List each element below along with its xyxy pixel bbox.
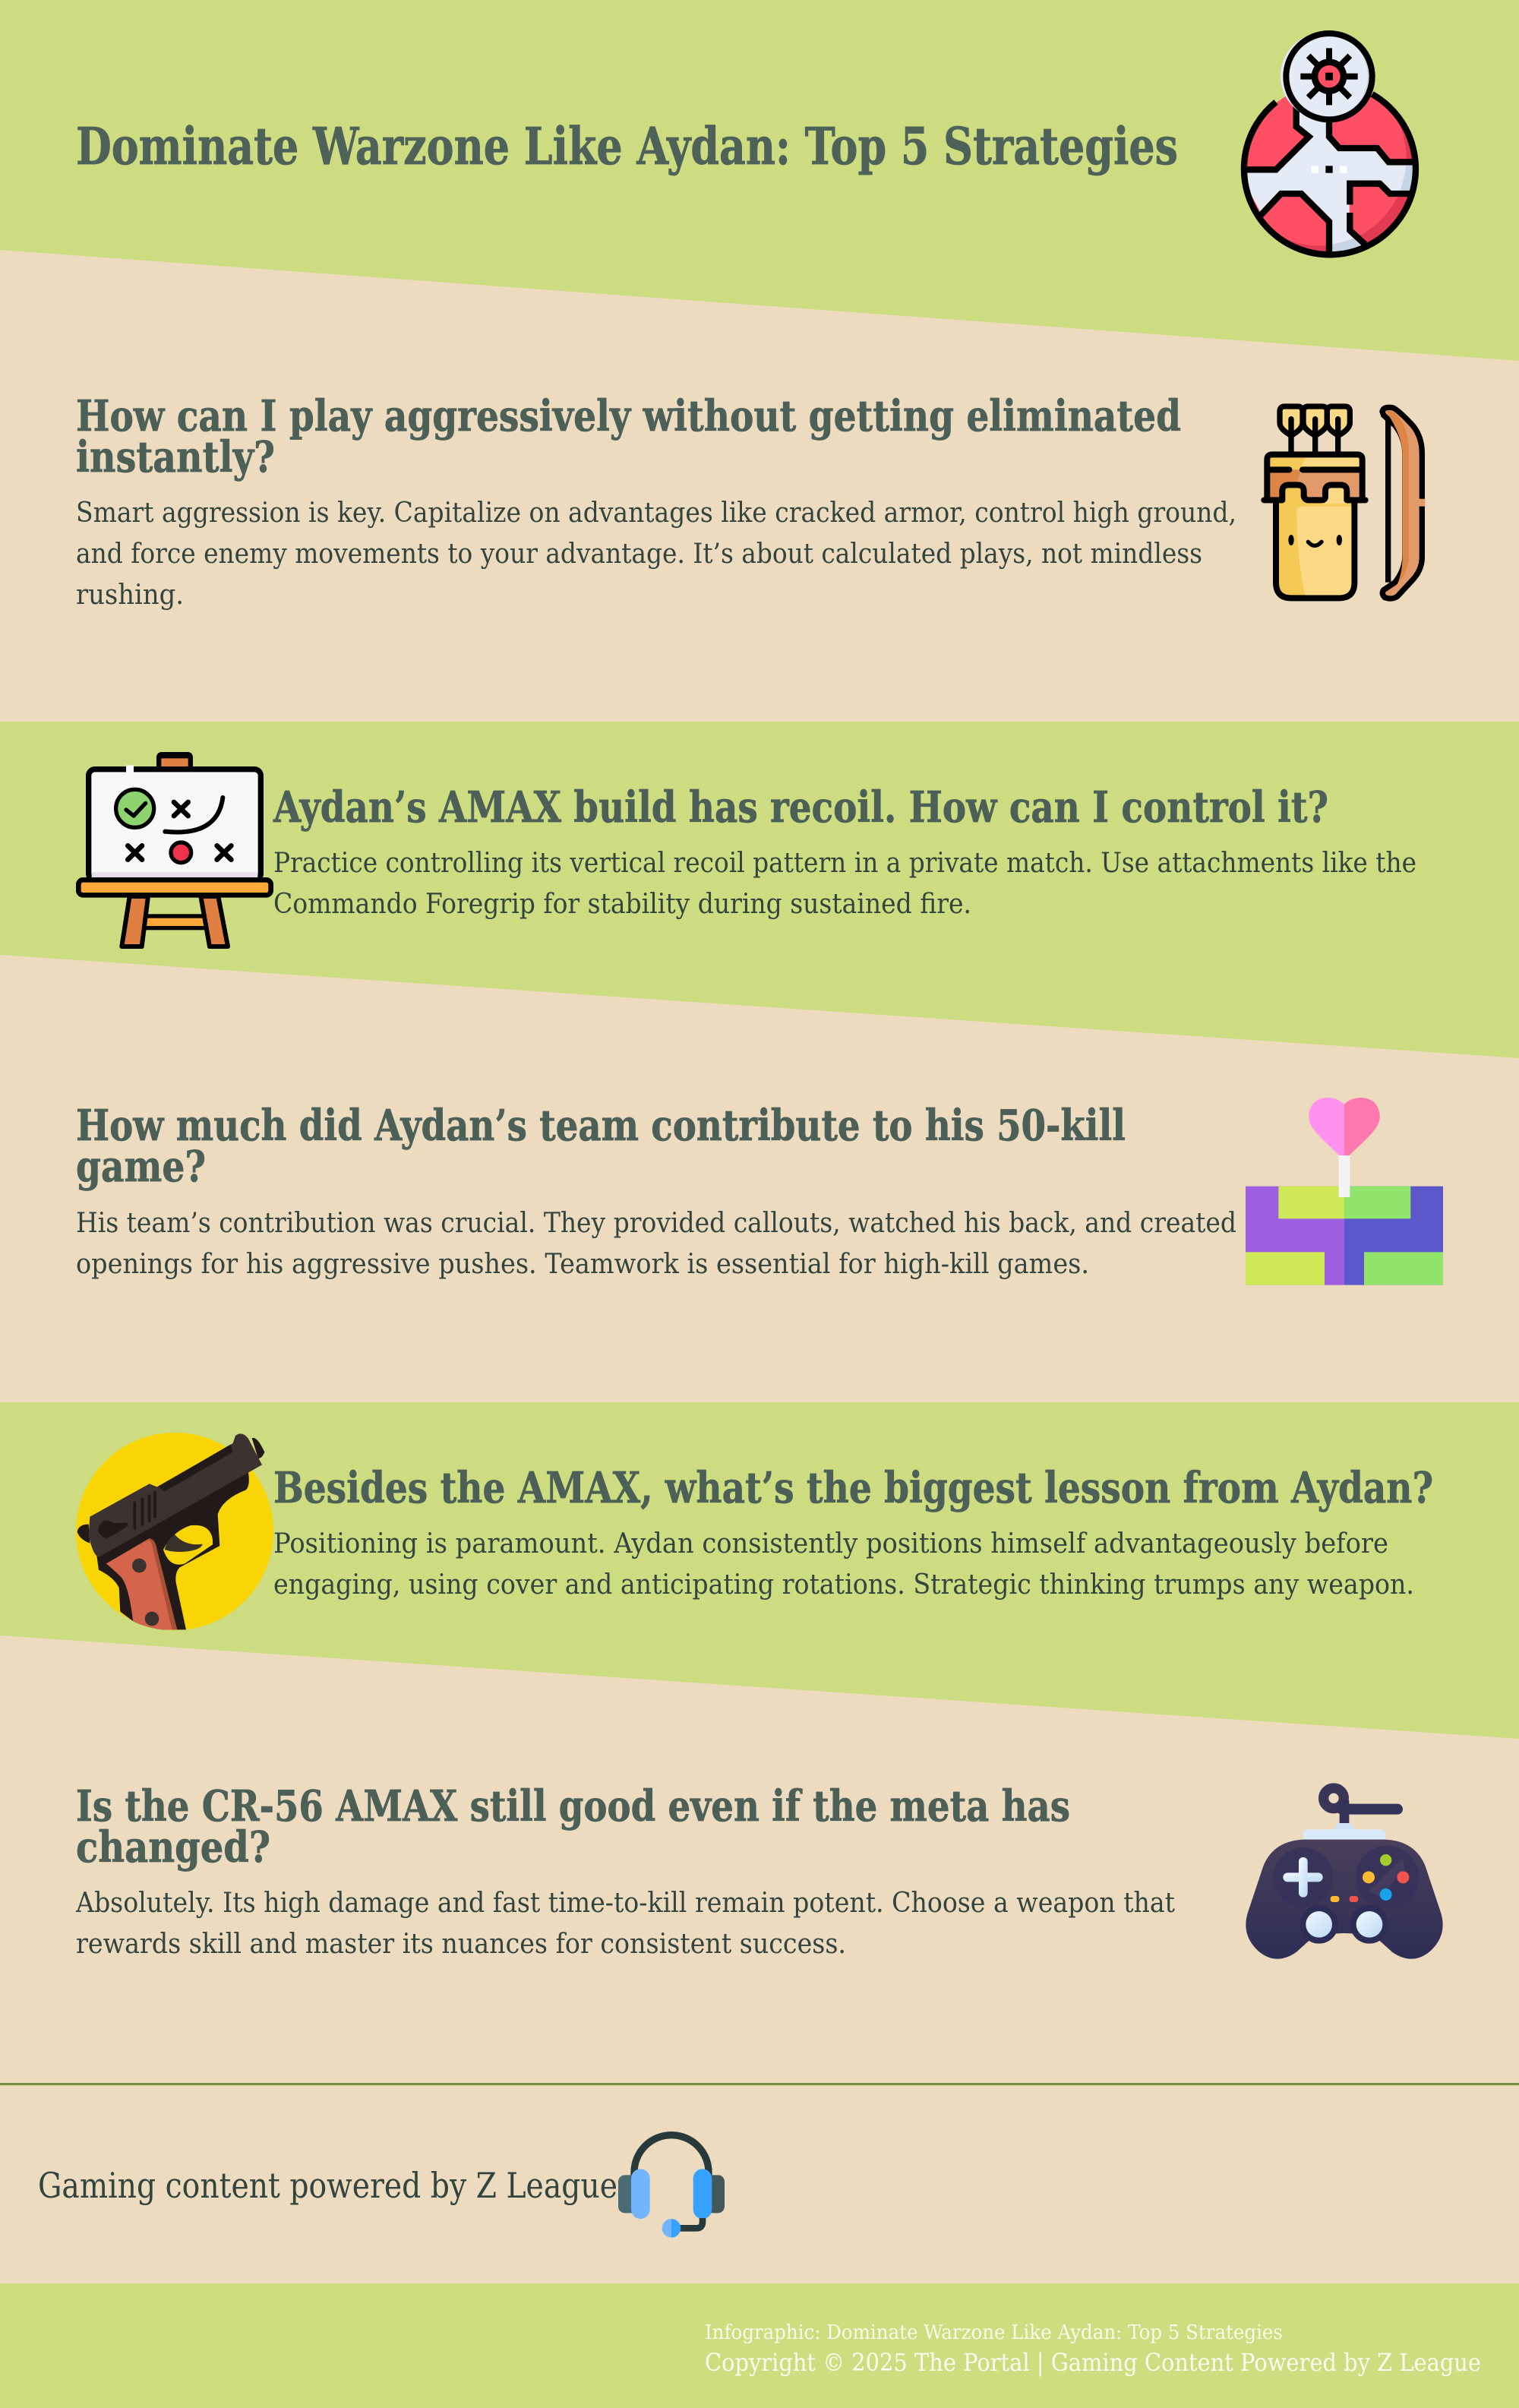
text block: Absolutely. Its high damage and fast time-to-kill remain potent. Choose a weapon that: [75, 1888, 1175, 1919]
panel: team contribution: [76, 1098, 1443, 1285]
text block: rushing.: [76, 580, 184, 611]
text block: [75, 1888, 1175, 1960]
text block: Commando Foregrip for stability during sustained fire.: [273, 889, 971, 920]
title: Dominate Warzone Like Aydan: Top 5 Strategies: [76, 116, 1178, 176]
icon: game controller: [1246, 1788, 1443, 1959]
icon: pistol on yellow circle: [76, 1433, 273, 1630]
scallop windows: [1282, 485, 1304, 504]
panel: biggest lesson: [76, 1433, 1433, 1630]
heading: [76, 1781, 1070, 1872]
heading: Aydan’s AMAX build has recoil. How can I control it?: [273, 782, 1328, 833]
credit line: [38, 2135, 725, 2238]
text block: rewards skill and master its nuances for consistent success.: [76, 1929, 846, 1960]
heading: [76, 1101, 1126, 1192]
text block: His team’s contribution was crucial. They provided callouts, watched his back, and created: [76, 1208, 1236, 1239]
text block: Positioning is paramount. Aydan consistently positions himself advantageously before: [273, 1528, 1388, 1560]
footer background: [0, 2283, 1519, 2408]
footer: [0, 2283, 1519, 2408]
text block: and force enemy movements to your advantage. It’s about calculated plays, not mindless: [76, 539, 1202, 570]
panel: CR-56 AMAX meta: [75, 1781, 1443, 1960]
text block: openings for his aggressive pushes. Teamwork is essential for high-kill games.: [76, 1249, 1089, 1280]
text block: engaging, using cover and anticipating rotations. Strategic thinking trumps any weapon.: [273, 1569, 1414, 1601]
icon: heart pin on map: [1246, 1098, 1443, 1285]
icon: tactics easel: [78, 752, 271, 946]
header panel: [76, 33, 1420, 261]
text block: [76, 1208, 1236, 1280]
heading: Is the CR-56 AMAX still good even if the meta has: [76, 1781, 1070, 1831]
heading: How can I play aggressively without getting eliminated: [76, 391, 1181, 441]
heading: game?: [76, 1142, 206, 1192]
text block: [273, 848, 1416, 920]
heading: [76, 391, 1181, 482]
panel: AMAX recoil: [78, 752, 1416, 946]
heading: How much did Aydan’s team contribute to his 50-kill: [76, 1101, 1126, 1151]
heading: instantly?: [76, 432, 275, 482]
text block: Smart aggression is key. Capitalize on advantages like cracked armor, control high ground,: [76, 498, 1236, 529]
icon: headset: [618, 2135, 725, 2238]
credit text: Gaming content powered by Z League: [38, 2165, 617, 2206]
text block: Practice controlling its vertical recoil pattern in a private match. Use attachments like the: [273, 848, 1416, 879]
icon: globe with virus: [1238, 33, 1420, 261]
infographic caption: Infographic: Dominate Warzone Like Aydan: Top 5 Strategies: [705, 2321, 1283, 2344]
panel: aggressive play: [76, 391, 1425, 611]
lid colours: [1267, 454, 1363, 469]
text block: [76, 498, 1236, 611]
icon: quiver and bow: [1264, 406, 1425, 599]
text block: [273, 1528, 1414, 1601]
heading: changed?: [76, 1822, 270, 1872]
